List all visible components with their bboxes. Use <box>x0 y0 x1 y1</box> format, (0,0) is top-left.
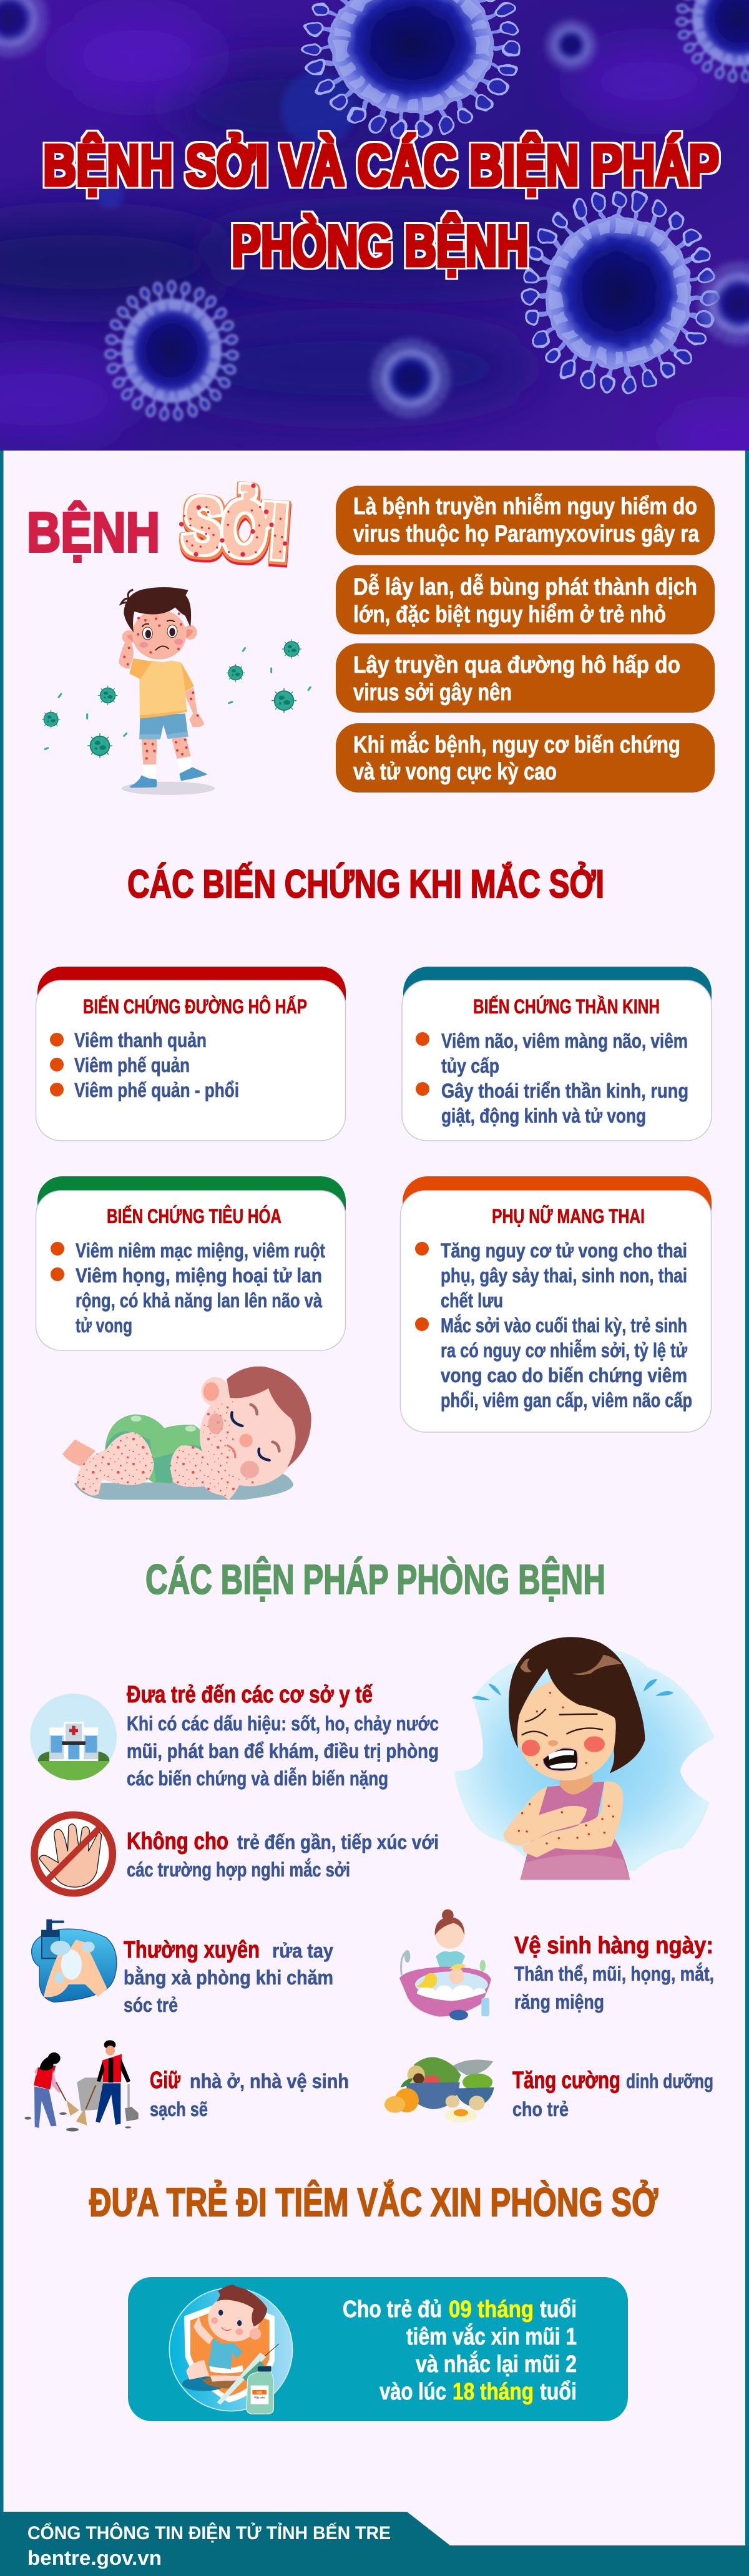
icon: no touching hand <box>34 1815 112 1893</box>
cheeks <box>522 1736 605 1756</box>
bullet list: Tăng nguy cơ tử vong cho thai <box>441 1239 687 1262</box>
closed eyes <box>232 1412 270 1460</box>
item text: Tăng cường <box>512 2067 620 2094</box>
mouth <box>227 1445 235 1458</box>
bullet list <box>57 1239 325 1337</box>
panel: prevention item - daily hygiene <box>399 1910 714 2020</box>
rash dots <box>519 1693 613 1843</box>
fact 3: Lây truyền qua đường hô hấp do <box>353 652 680 678</box>
dress lower <box>520 1855 630 1880</box>
hair <box>509 1637 645 1773</box>
item text <box>512 2067 713 2120</box>
title <box>43 132 719 278</box>
back foot <box>62 1440 95 1466</box>
fact 3: virus sởi gây nên <box>353 680 512 706</box>
heading: complications: CÁC BIẾN CHỨNG KHI MẮC SỞI <box>127 862 604 906</box>
sweat drops <box>472 1679 673 1700</box>
face rash <box>202 1401 260 1483</box>
icon: hand washing <box>32 1920 117 2002</box>
diaper highlights <box>130 1416 196 1432</box>
item text: Khi có các dấu hiệu: sốt, ho, chảy nước <box>127 1712 439 1735</box>
ear <box>201 1377 230 1406</box>
schedule text: tiêm vắc xin mũi 1 <box>406 2323 577 2350</box>
inner ear <box>203 1382 219 1401</box>
fact 1 <box>336 485 715 555</box>
icon: baby bath <box>399 1910 491 2020</box>
footer website: bentre.gov.vn <box>27 2547 162 2569</box>
shadow <box>122 782 215 795</box>
inner ears <box>127 629 193 642</box>
shirt <box>139 660 194 718</box>
footer organisation: CỔNG THÔNG TIN ĐIỆN TỬ TỈNH BẾN TRE <box>27 2522 391 2544</box>
item text: trẻ đến gần, tiếp xúc với <box>237 1831 439 1853</box>
schedule text: Cho trẻ đủ <box>343 2296 442 2323</box>
card title: BIẾN CHỨNG TIÊU HÓA <box>107 1205 281 1227</box>
panel: prevention item - medical facility <box>30 1682 439 1790</box>
illustration: crying girl <box>454 1637 715 1880</box>
item text: nhà ở, nhà vệ sinh <box>190 2070 349 2092</box>
diaper <box>105 1415 208 1483</box>
icon: people cleaning <box>24 2040 139 2132</box>
bullet list: Viêm niêm mạc miệng, viêm ruột <box>76 1239 325 1262</box>
title: PHÒNG BỆNH <box>232 213 529 278</box>
panel: prevention item - avoid contact <box>34 1815 439 1893</box>
nose <box>548 1740 558 1746</box>
hair tuft <box>121 590 133 604</box>
schedule text <box>343 2296 577 2405</box>
card title: BIẾN CHỨNG ĐƯỜNG HÔ HẤP <box>83 995 307 1018</box>
icon: baby with vaccine: Vắc xin <box>254 2396 265 2400</box>
nose <box>239 1434 253 1447</box>
cheeks <box>139 638 183 648</box>
shoes <box>129 767 208 788</box>
item text: Vệ sinh hàng ngày: <box>514 1933 713 1959</box>
panel: digestive complications <box>36 1176 346 1350</box>
header banner with virus background <box>0 0 749 462</box>
item text: Không cho <box>127 1828 228 1855</box>
fact 3 <box>336 643 715 713</box>
bullet list: vong cao do biến chứng viêm <box>441 1364 687 1387</box>
eyebrows and mouth <box>142 620 174 650</box>
footer band <box>0 2512 749 2576</box>
icon: healthy food <box>384 2057 494 2122</box>
bullet list: Viêm phế quản - phổi <box>74 1079 239 1101</box>
card body <box>401 1191 712 1432</box>
diaper shade <box>105 1431 208 1483</box>
bullet list: ra có nguy cơ nhiễm sởi, tỷ lệ tử <box>441 1339 688 1362</box>
panel: neurological complications <box>402 967 712 1141</box>
sticker: SỞI: SỞI <box>180 482 290 575</box>
illustration: sleeping baby with rash <box>62 1367 311 1500</box>
shorts cuffs <box>139 732 188 739</box>
ears <box>122 625 197 644</box>
item text: Giữ <box>150 2067 180 2094</box>
item text: răng miệng <box>514 1991 604 2013</box>
card band <box>37 967 346 1023</box>
card body <box>402 980 712 1141</box>
head <box>200 1387 300 1486</box>
card body <box>36 1191 346 1350</box>
card band <box>403 967 712 1023</box>
bullet list: chết lưu <box>441 1289 503 1312</box>
eyebrows <box>251 1405 279 1451</box>
panel: vaccine schedule <box>128 2277 628 2421</box>
panel: prevention item - clean home <box>24 2040 349 2132</box>
heading: BỆNH: BỆNH <box>27 500 160 564</box>
panel: disease facts <box>336 485 715 793</box>
panel: respiratory complications <box>36 967 346 1141</box>
item text: các biến chứng và diễn biến nặng <box>127 1767 388 1790</box>
ground shadow <box>74 1473 293 1500</box>
bullet list: Mắc sởi vào cuối thai kỳ, trẻ sinh <box>441 1314 687 1337</box>
bullet list: giật, động kinh và tử vong <box>441 1105 646 1127</box>
card band <box>403 1176 712 1232</box>
item text: các trường hợp nghi mắc sởi <box>127 1858 350 1881</box>
face <box>517 1679 617 1780</box>
fact 4 <box>336 723 715 793</box>
footer <box>0 2512 749 2576</box>
schedule text: 18 tháng <box>453 2379 534 2405</box>
hair <box>227 1367 311 1468</box>
bullet list: Viêm não, viêm màng não, viêm <box>441 1030 688 1052</box>
item text <box>127 1712 439 1790</box>
panel: prevention item - wash hands <box>32 1920 333 2016</box>
neck <box>560 1773 593 1795</box>
item text: dinh dưỡng <box>626 2070 713 2092</box>
item text: Thường xuyên <box>124 1937 260 1963</box>
box <box>128 2277 628 2421</box>
dress <box>520 1782 630 1880</box>
icon: hospital <box>30 1694 117 1780</box>
rash dots <box>124 613 198 758</box>
item title: Đưa trẻ đến các cơ sở y tế <box>127 1682 373 1708</box>
hair <box>124 587 191 632</box>
illustration: sick boy <box>42 587 310 795</box>
item text <box>150 2067 349 2120</box>
teeth <box>548 1750 576 1769</box>
card band <box>37 1176 346 1232</box>
eyes <box>142 625 177 640</box>
item text: mũi, phát ban để khám, điều trị phòng <box>127 1740 439 1762</box>
hair highlights <box>520 1655 622 1675</box>
item text: sóc trẻ <box>124 1994 178 2016</box>
bullet list: tủy cấp <box>441 1055 499 1077</box>
item text <box>127 1828 439 1881</box>
bullet list <box>423 1030 688 1127</box>
legs <box>142 738 191 766</box>
bullet list <box>422 1239 692 1412</box>
schedule text: tuổi <box>540 2379 577 2405</box>
shirt hem and sleeves <box>129 658 194 718</box>
item text: bằng xà phòng khi chăm <box>124 1966 333 1989</box>
schedule text: tuổi <box>540 2296 577 2323</box>
item text: rửa tay <box>272 1939 333 1962</box>
bullet list: phổi, viêm gan cấp, viêm não cấp <box>441 1389 692 1412</box>
bullet list: phụ, gây sảy thai, sinh non, thai <box>441 1264 687 1287</box>
bullet list: Gây thoái triển thần kinh, rung <box>441 1080 688 1102</box>
panel: pregnant women <box>401 1176 712 1432</box>
item text: sạch sẽ <box>150 2098 208 2120</box>
mouth <box>542 1748 578 1772</box>
cheeks <box>208 1413 259 1478</box>
bullet list: Viêm họng, miệng hoại tử lan <box>76 1264 322 1287</box>
ear <box>617 1720 634 1752</box>
shorts <box>139 713 188 739</box>
limbs <box>77 1432 239 1500</box>
bullet list: Viêm phế quản <box>74 1054 190 1076</box>
schedule text: và nhắc lại mũi 2 <box>416 2350 577 2378</box>
item text <box>514 1933 714 2013</box>
card body <box>36 980 346 1141</box>
item text: Thân thể, mũi, họng, mắt, <box>514 1963 714 1985</box>
fact 2: lớn, đặc biệt nguy hiểm ở trẻ nhỏ <box>353 602 666 628</box>
closed eyes and brows <box>522 1709 602 1736</box>
bullet list: tử vong <box>76 1314 132 1337</box>
arms <box>119 641 204 727</box>
fact 2: Dễ lây lan, dễ bùng phát thành dịch <box>353 573 697 600</box>
teal viruses <box>42 639 310 758</box>
panel: prevention item - nutrition <box>384 2057 713 2122</box>
card title: PHỤ NỮ MANG THAI <box>492 1205 645 1227</box>
card title: BIẾN CHỨNG THẦN KINH <box>473 995 660 1018</box>
fact 4: và tử vong cực kỳ cao <box>353 759 557 785</box>
icon: baby with vaccine: SỞI <box>257 2390 263 2394</box>
icon: baby with vaccine <box>169 2285 293 2414</box>
arms <box>504 1782 623 1858</box>
face <box>132 610 186 660</box>
socks <box>143 756 192 778</box>
fact 1: Là bệnh truyền nhiễm nguy hiểm do <box>353 492 697 520</box>
blue shirt <box>204 1456 215 1470</box>
fact 2 <box>336 565 715 634</box>
schedule text: 09 tháng <box>449 2296 534 2323</box>
bullet list <box>57 1029 239 1101</box>
item text: cho trẻ <box>512 2098 569 2120</box>
item text <box>124 1937 333 2016</box>
bullet list: rộng, có khả năng lan lên não và <box>76 1289 322 1312</box>
bullet list: Viêm thanh quản <box>74 1029 207 1051</box>
blue blob <box>454 1651 715 1871</box>
schedule text: vào lúc <box>379 2379 446 2405</box>
fact 4: Khi mắc bệnh, nguy cơ biến chứng <box>353 731 680 758</box>
